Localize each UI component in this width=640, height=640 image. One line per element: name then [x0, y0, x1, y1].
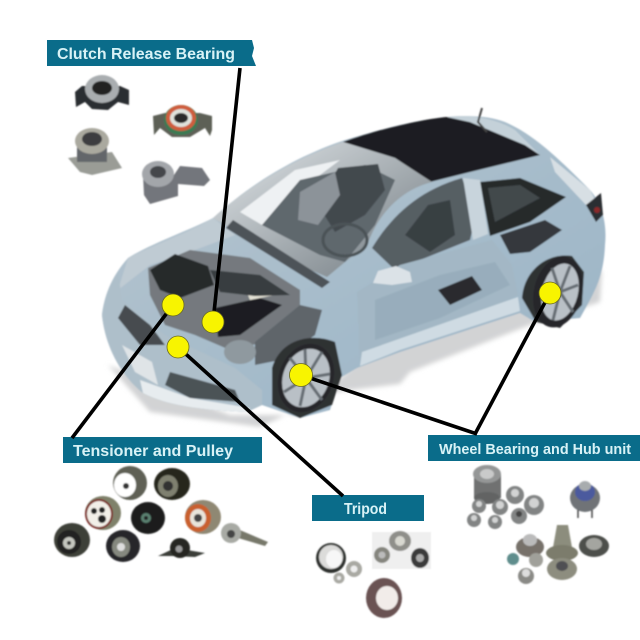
front bumper: [102, 272, 262, 412]
dark bearing: [75, 75, 129, 110]
large ring bearing: [316, 543, 346, 573]
front wheel: [269, 336, 343, 420]
rear lamp: [586, 193, 603, 222]
door panel lower: [357, 240, 518, 362]
red bearing: [153, 105, 212, 137]
bearing set: [467, 486, 544, 529]
callout lines: [72, 68, 550, 496]
marker dots: [162, 282, 561, 386]
panel: tripod: [312, 495, 431, 618]
hood left panel: [118, 218, 235, 290]
steering wheel: [323, 224, 367, 256]
heading: tensioner and pulley: [63, 437, 262, 463]
ground shadow: [108, 270, 602, 427]
panel: wheel bearing and hub unit: [428, 435, 640, 584]
side rear window: [480, 178, 566, 236]
side front window: [372, 178, 476, 270]
heading: tensioner and pulley: Tensioner and Pulley: [73, 443, 233, 460]
three hole pulley: [85, 496, 121, 530]
car illustration: [102, 108, 605, 427]
small bearings: [334, 561, 362, 584]
car body: [102, 116, 605, 418]
heading: clutch release bearing: Clutch Release Bearing: [57, 46, 235, 63]
orange pulley: [185, 500, 221, 534]
black pulley bottom: [106, 530, 140, 562]
panel: tensioner and pulley: [54, 437, 268, 562]
parts: wheel bearings: [467, 465, 609, 584]
panel: clutch release bearing: [47, 40, 256, 204]
heading: tripod: Tripod: [344, 501, 387, 518]
black pulley left: [54, 523, 90, 557]
rear spoiler: [550, 157, 598, 205]
heading: clutch release bearing: [47, 40, 256, 66]
blue hub: [570, 481, 600, 518]
rear wheel: [522, 251, 590, 333]
heading: wheel bearing and hub unit: [428, 435, 640, 461]
flanged bearing: [68, 128, 122, 175]
brown bushing: [366, 578, 402, 618]
heading: wheel bearing and hub unit: Wheel Bearing and Hub unit: [439, 441, 631, 458]
black pulley: [154, 468, 190, 500]
parts: pulleys: [54, 466, 268, 562]
roof: [343, 117, 540, 182]
hub group: [507, 525, 609, 584]
tall double bearing: [473, 465, 501, 504]
bearing photo: [372, 531, 431, 569]
windshield cabin: [213, 142, 432, 277]
centre black pulley: [131, 502, 165, 534]
silver arm tensioner: [221, 523, 268, 546]
parts: tripod bearings: [316, 531, 431, 618]
antenna: [478, 108, 487, 132]
small arm tensioner: [158, 538, 205, 558]
hydraulic bearing: [142, 161, 210, 204]
engine bay: [148, 250, 300, 350]
parts: clutch bearings: [68, 75, 212, 204]
white pulley: [113, 466, 147, 500]
